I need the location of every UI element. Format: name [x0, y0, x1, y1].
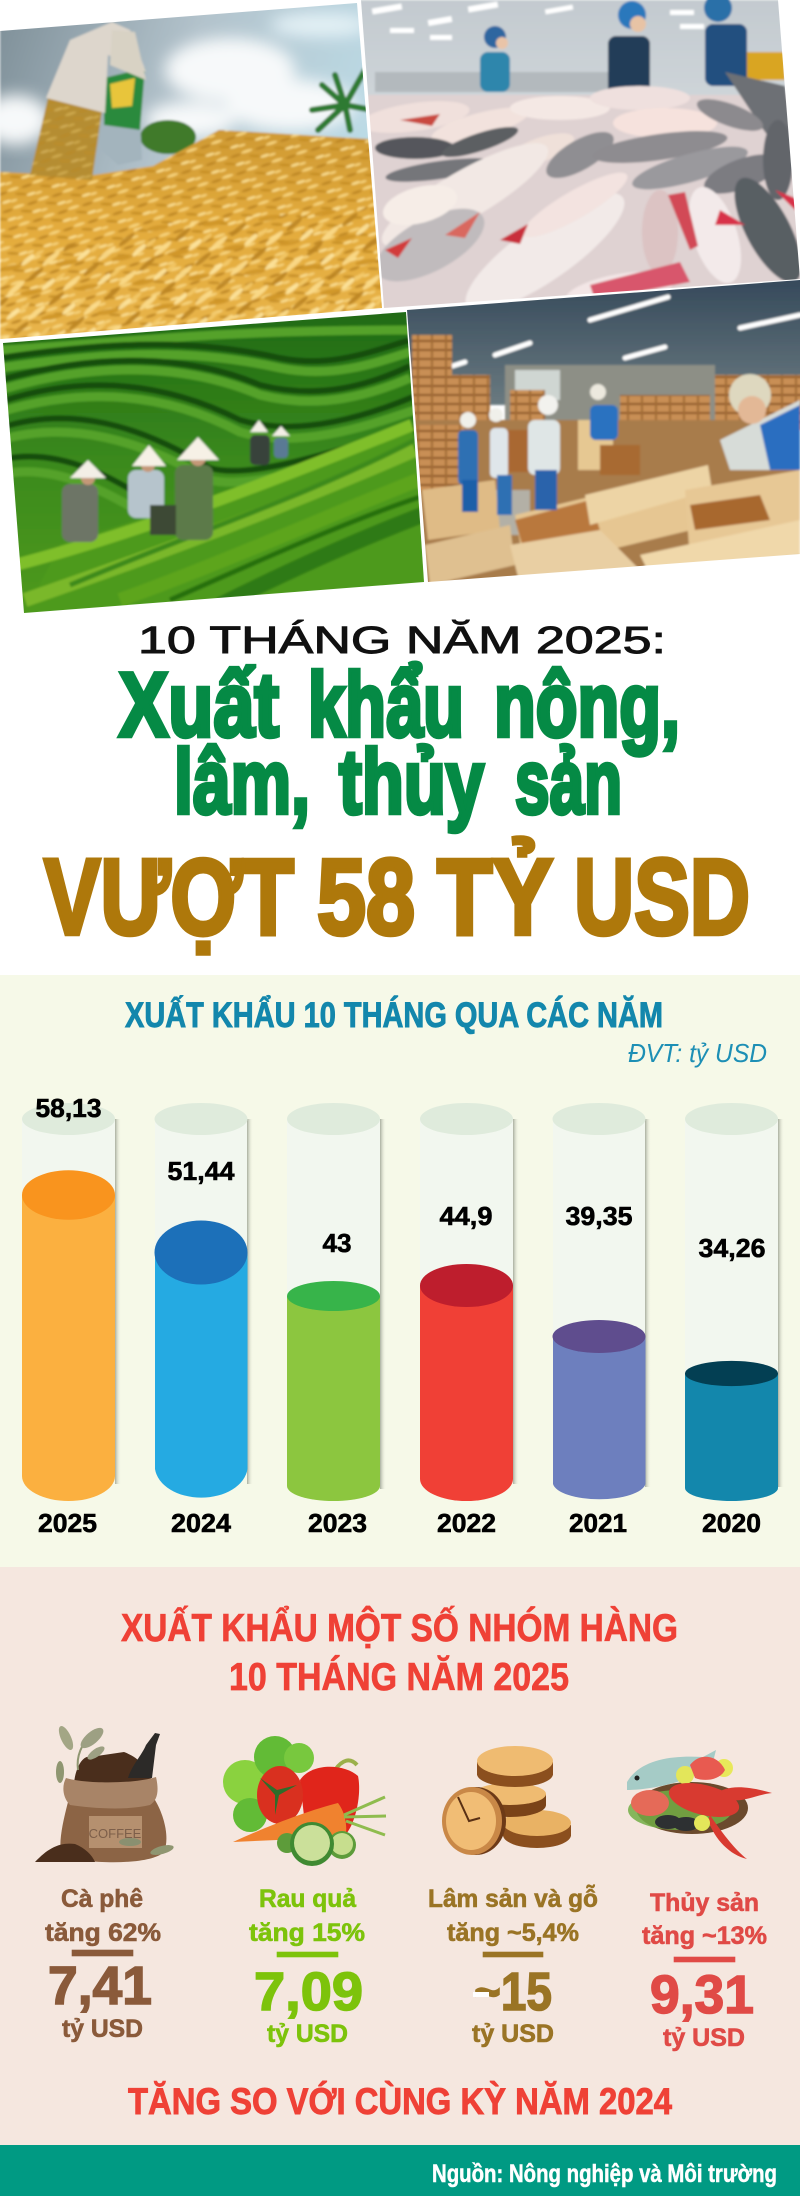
photo: tea hills [0, 310, 430, 615]
cylinder 2020: 2020 [702, 1508, 761, 1538]
title line: vượt 58 tỷ USD: USD [574, 836, 750, 957]
cylinder 2021: 2021 [569, 1508, 627, 1538]
cylinder 2025: 2025 [38, 1508, 97, 1538]
item: vegetables and fruit: Rau quả [259, 1885, 357, 1913]
title line: lâm, thủy sản [174, 732, 622, 833]
cylinder 2020: 34,26 [698, 1233, 766, 1263]
title line: vượt 58 tỷ USD [44, 836, 750, 957]
cylinder 2021: 39,35 [566, 1201, 632, 1231]
closing note: TĂNG SO VỚI CÙNG KỲ NĂM 2024 [128, 2080, 672, 2122]
title line: date: 10 THÁNG NĂM 2025: [138, 619, 666, 662]
unit note: ĐVT: tỷ USD [628, 1038, 767, 1068]
cylinder 2022: 44,9 [440, 1201, 492, 1231]
title line: lâm, thủy sản: thủy [339, 732, 484, 833]
item: coffee: Cà phê [61, 1885, 143, 1913]
item: forest products and wood: ~15 [474, 1962, 552, 2022]
title line: vượt 58 tỷ USD: VƯỢT [44, 836, 294, 957]
title line: vượt 58 tỷ USD: TỶ [437, 836, 553, 957]
item: coffee: tăng 62% [45, 1919, 161, 1947]
worker [480, 26, 510, 92]
bar chart: cylinders [22, 1093, 784, 1538]
cylinder 2025: 58,13 [36, 1093, 102, 1123]
cylinder 2023: 2023 [308, 1508, 367, 1538]
item: seafood [642, 1889, 767, 2052]
cylinder 2020 [685, 1103, 784, 1538]
cylinder 2023 [287, 1103, 386, 1538]
cylinder 2022 [420, 1103, 519, 1538]
photo: fish processing [355, 0, 800, 329]
cylinder 2024 [154, 1103, 253, 1538]
item: coffee: 7,41 [48, 1956, 152, 2016]
item: coffee [45, 1885, 161, 2043]
cylinder 2024: 2024 [171, 1508, 232, 1538]
footer: source [0, 2145, 800, 2196]
section heading [121, 1605, 678, 1699]
farmers [62, 420, 290, 542]
icon: coffee sack: COFFEE [89, 1826, 142, 1841]
worker [608, 1, 650, 98]
item: forest products and wood: tăng ~5,4% [447, 1919, 579, 1947]
item: vegetables and fruit [249, 1885, 365, 2048]
icon: seafood platter [627, 1750, 772, 1859]
title line: Xuất khẩu nông: Xuất [119, 655, 279, 756]
panel: exports over the years [0, 975, 800, 1567]
title line: Xuất khẩu nông: khẩu [308, 655, 464, 756]
item: coffee: tỷ USD [62, 2015, 143, 2043]
item: forest products and wood: Lâm sản và gỗ [428, 1883, 598, 1913]
worker [704, 0, 747, 86]
item: seafood: Thủy sản [650, 1889, 759, 1917]
item: seafood: tỷ USD [663, 2024, 745, 2052]
item: vegetables and fruit: tăng 15% [249, 1919, 365, 1947]
title line: lâm, thủy sản: lâm, [174, 732, 310, 833]
section heading: 10 THÁNG NĂM 2025 [229, 1655, 569, 1699]
workers [458, 374, 800, 515]
panel: export groups [0, 1567, 800, 2145]
icon: wood slices [442, 1746, 571, 1855]
chart heading: XUẤT KHẨU 10 THÁNG QUA CÁC NĂM [125, 995, 663, 1035]
photo: rice harvest [0, 0, 385, 340]
item: vegetables and fruit: tỷ USD [267, 2020, 348, 2048]
cylinder 2022: 2022 [437, 1508, 496, 1538]
item: seafood: tăng ~13% [642, 1922, 767, 1950]
section heading: XUẤT KHẨU MỘT SỐ NHÓM HÀNG [121, 1605, 678, 1650]
title line: Xuất khẩu nông [119, 655, 680, 756]
photo: wood factory [400, 275, 800, 590]
item: vegetables and fruit: 7,09 [254, 1962, 363, 2022]
title block [44, 619, 750, 957]
cylinder 2024: 51,44 [168, 1156, 235, 1186]
cylinder 2025 [22, 1093, 121, 1538]
title line: vượt 58 tỷ USD: 58 [317, 836, 415, 957]
cylinder 2023: 43 [322, 1228, 352, 1258]
item: forest products and wood [428, 1883, 598, 2048]
item: seafood: 9,31 [650, 1965, 754, 2025]
icon: vegetables [223, 1736, 386, 1866]
title line: lâm, thủy sản: sản [515, 732, 622, 833]
icon: coffee sack [35, 1724, 175, 1862]
item: forest products and wood: tỷ USD [472, 2020, 554, 2048]
photo collage [0, 0, 800, 615]
title line: Xuất khẩu nông: nông, [494, 655, 680, 756]
cylinder 2021 [552, 1103, 651, 1538]
